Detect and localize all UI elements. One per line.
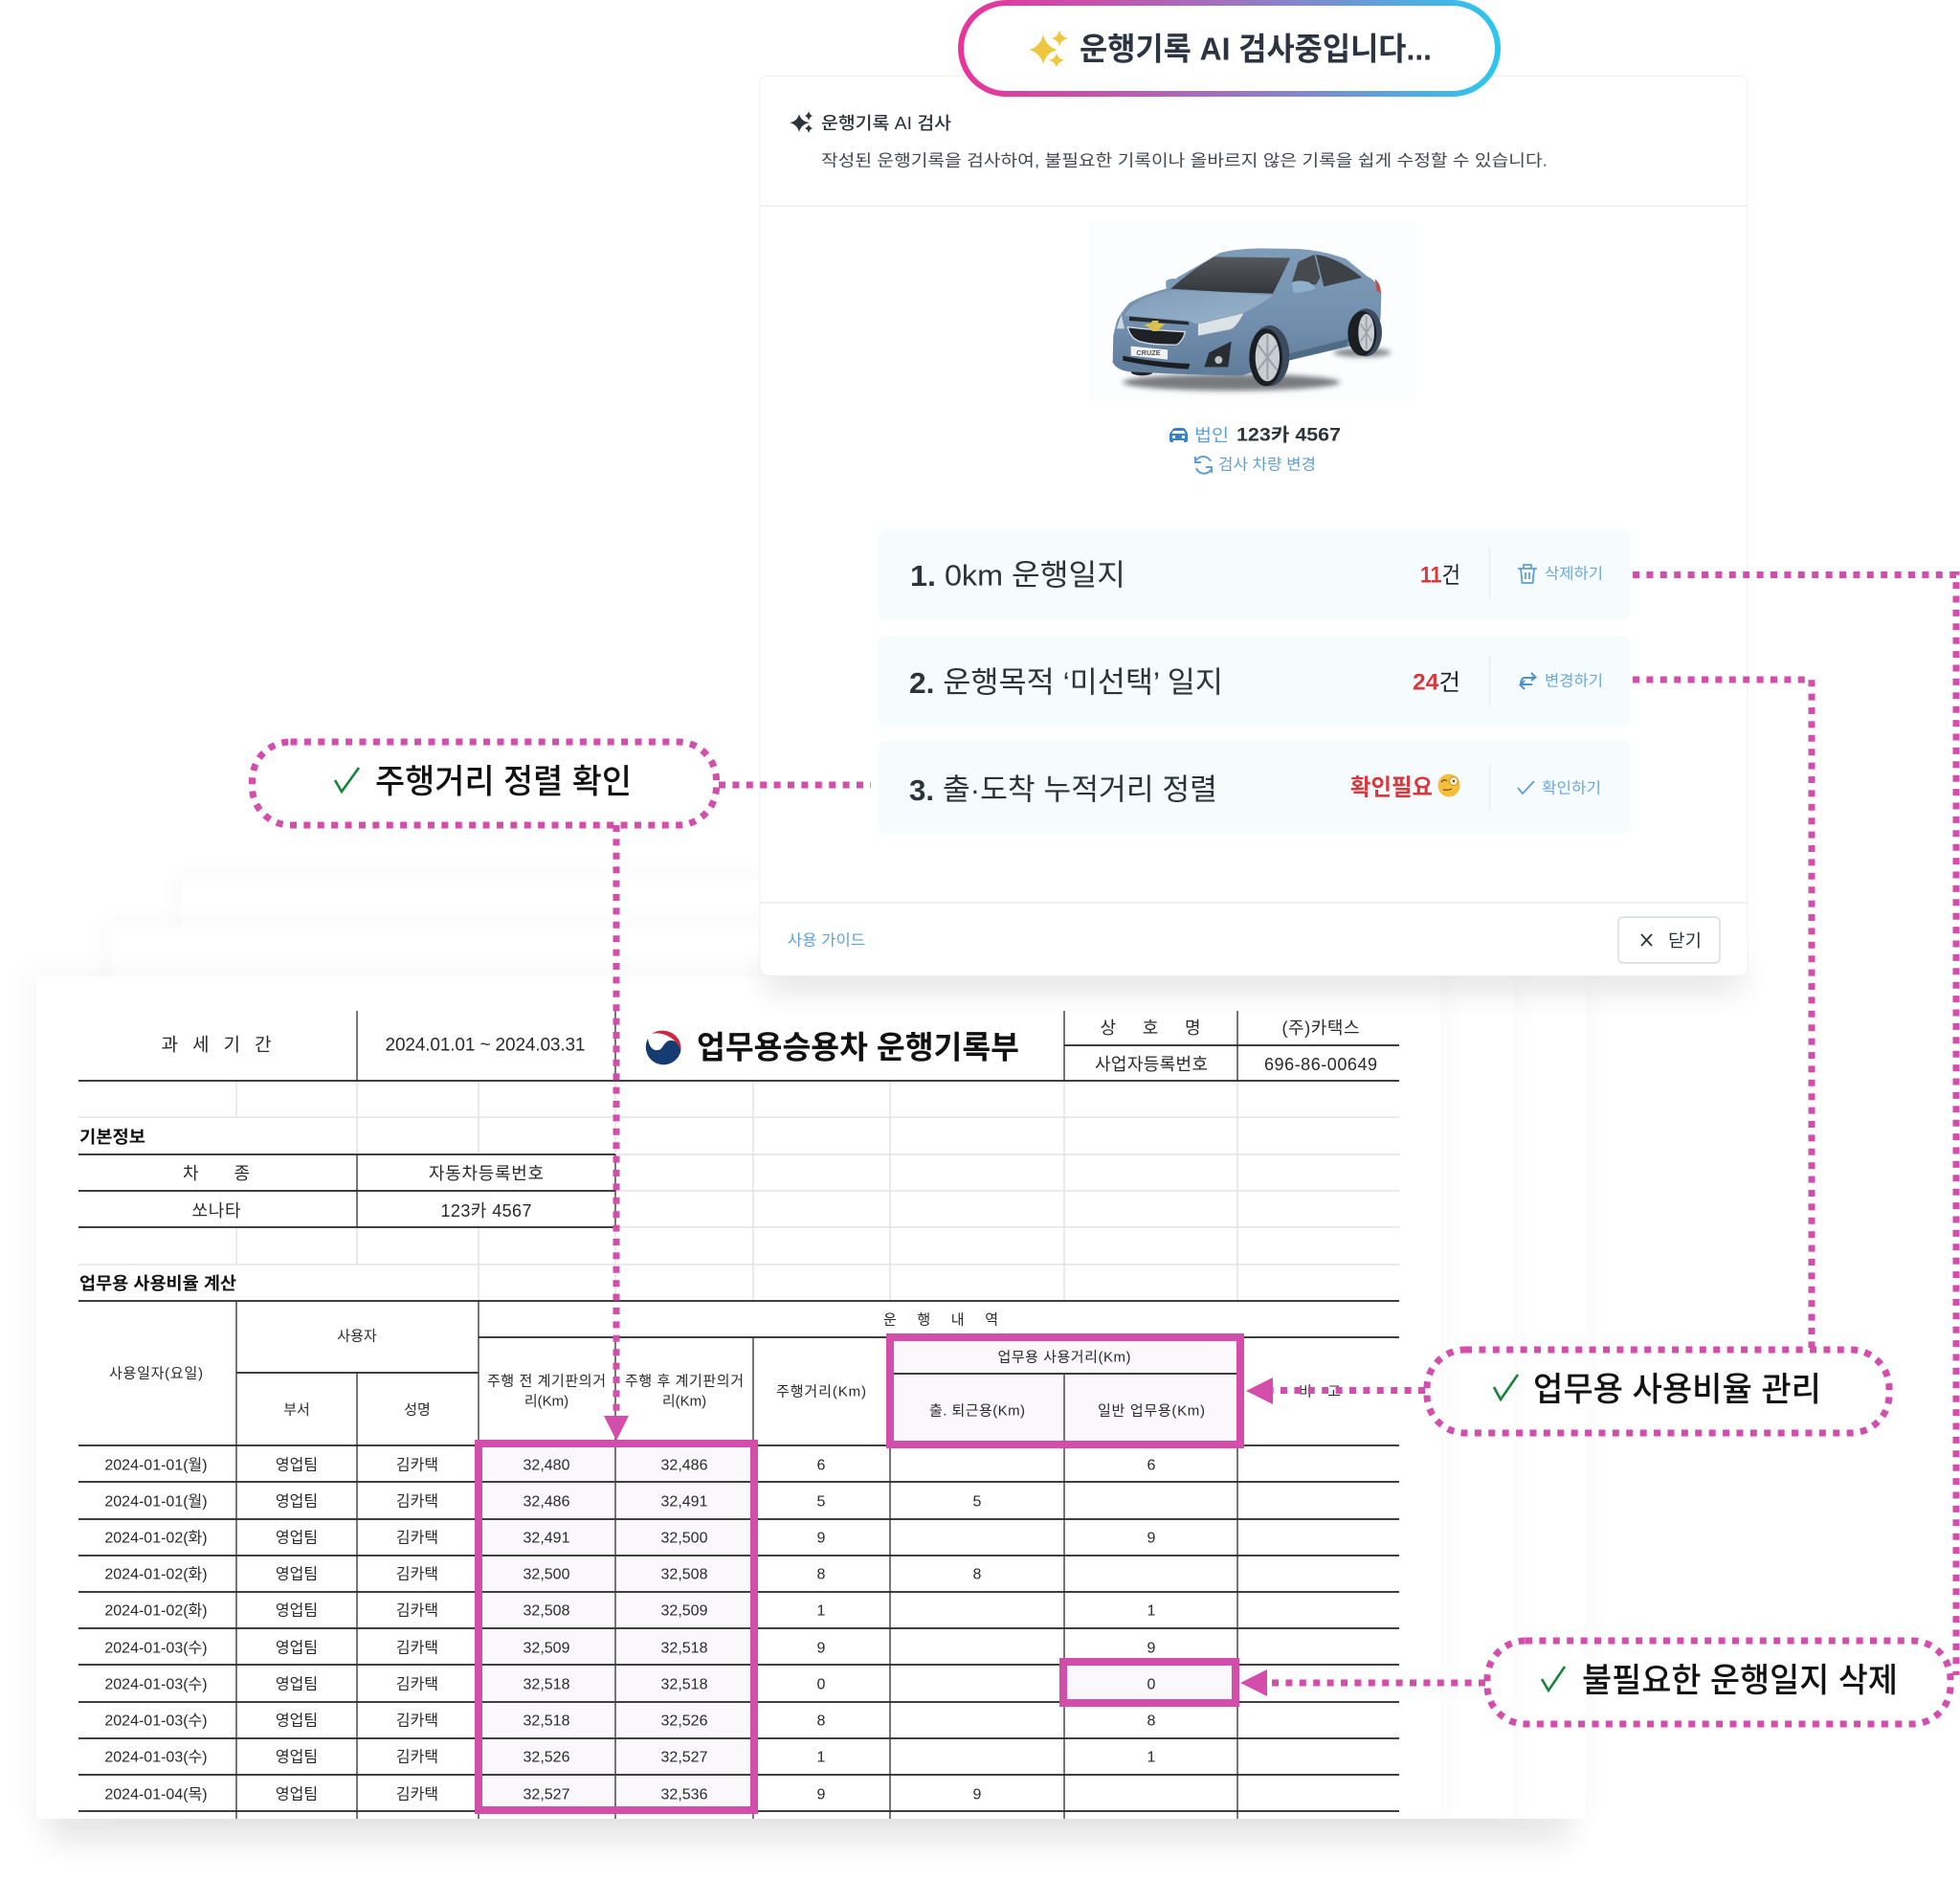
highlight box: business distance columns — [890, 1337, 1240, 1444]
log table rows: 9 — [1147, 1530, 1156, 1547]
log table rows: 8 — [1147, 1713, 1156, 1729]
form header: 2024.01.01 ~ 2024.03.31 — [385, 1036, 586, 1055]
log table rows: 1 — [1147, 1750, 1156, 1765]
icon: government taegeuk logo — [645, 1030, 681, 1064]
log table column headers: 주행거리(Km) — [776, 1384, 866, 1400]
form header: 696-86-00649 — [1264, 1055, 1377, 1074]
log table rows: 32,536 — [661, 1786, 708, 1803]
log table rows: 32,486 — [523, 1493, 570, 1511]
vehicle identification: 123카 4567 — [1236, 425, 1341, 446]
check item 3: cumulative distance order: 3. 출·도착 누적거리 정렬 — [909, 773, 1217, 806]
usage guide link: 사용 가이드 — [788, 932, 865, 950]
document: vehicle operation log form — [78, 1011, 1399, 1819]
check item 3: cumulative distance order: 확인하기 — [1542, 779, 1601, 796]
close button — [1618, 917, 1720, 963]
check item 1: 0km logs: 삭제하기 — [1545, 565, 1603, 582]
callout: delete unnecessary logs — [1487, 1641, 1950, 1724]
callout: sort check — [253, 742, 716, 825]
log table rows: 32,500 — [523, 1566, 570, 1583]
highlight box: odometer columns — [479, 1444, 754, 1810]
log table rows: 5 — [973, 1493, 982, 1511]
section: basic info: 차 종 — [183, 1164, 250, 1183]
log table rows: 32,518 — [523, 1677, 570, 1692]
section: basic info: 자동차등록번호 — [429, 1164, 544, 1183]
log table rows: 김카택 — [396, 1457, 438, 1474]
callout: business ratio: 업무용 사용비율 관리 — [1533, 1371, 1821, 1409]
log table column headers: 부서 — [283, 1401, 310, 1419]
callout: delete unnecessary logs: 불필요한 운행일지 삭제 — [1582, 1662, 1898, 1700]
log table rows: 영업팀 — [276, 1675, 318, 1692]
log table rows: 8 — [817, 1713, 826, 1729]
log table rows: 9 — [817, 1786, 826, 1803]
check item 1: 0km logs — [878, 529, 1631, 619]
icon: check — [1518, 781, 1534, 794]
icon: green check — [1494, 1375, 1518, 1400]
check item 2: unselected purpose: 2. 운행목적 ‘미선택’ 일지 — [909, 666, 1223, 699]
log table rows: 2024-01-03(수) — [104, 1675, 208, 1692]
log table rows: 32,509 — [661, 1602, 708, 1620]
check item 2: unselected purpose — [878, 636, 1631, 727]
connector: item 3 to sort callout — [719, 781, 871, 789]
arrow: ratio callout to business columns — [1246, 1377, 1425, 1404]
change vehicle link: 검사 차량 변경 — [1218, 456, 1316, 473]
log table rows: 8 — [973, 1566, 982, 1583]
log table rows: 32,491 — [523, 1530, 570, 1547]
log table column headers: 리(Km) — [662, 1394, 706, 1409]
log table rows: 영업팀 — [276, 1566, 318, 1583]
log table rows: 9 — [973, 1786, 982, 1803]
log table column headers: 출. 퇴근용(Km) — [929, 1403, 1025, 1419]
check item 3: cumulative distance order — [878, 741, 1631, 834]
arrow: sort callout to odometer columns — [604, 825, 629, 1441]
log table rows: 김카택 — [396, 1786, 438, 1803]
log table rows: 32,508 — [523, 1602, 570, 1620]
log table rows: 9 — [1147, 1641, 1156, 1656]
log table rows: 32,527 — [523, 1786, 570, 1803]
log table rows: 김카택 — [396, 1566, 438, 1583]
check item 1: 0km logs: 11건 — [1420, 563, 1460, 588]
log table rows: 32,518 — [523, 1713, 570, 1729]
log table rows: 32,526 — [661, 1713, 708, 1729]
log table rows: 영업팀 — [276, 1748, 318, 1765]
log table rows: 김카택 — [396, 1675, 438, 1692]
log table rows: 1 — [817, 1602, 826, 1620]
log table rows: 1 — [1147, 1602, 1156, 1620]
log table rows: 32,508 — [661, 1566, 708, 1583]
log table column headers: 주행 전 계기판의거 — [487, 1373, 606, 1390]
log table rows: 9 — [817, 1530, 826, 1547]
connector: item 2 to ratio callout — [1633, 680, 1812, 1348]
icon: yellow sparkles — [1029, 30, 1068, 68]
log table column headers: 운 행 내 역 — [883, 1311, 998, 1329]
modal heading: 운행기록 AI 검사 — [821, 114, 951, 133]
arrow: delete callout to zero cell — [1240, 1669, 1485, 1696]
icon: monocle emoji — [1437, 773, 1460, 796]
log table rows: 김카택 — [396, 1602, 438, 1620]
form header: 과 세 기 간 — [161, 1034, 272, 1055]
log table rows: 김카택 — [396, 1712, 438, 1729]
log table rows: 김카택 — [396, 1639, 438, 1656]
log table column headers: 비 고 — [1299, 1384, 1341, 1400]
callout: business ratio — [1427, 1350, 1889, 1433]
vehicle identification — [1169, 425, 1341, 446]
log table rows: 영업팀 — [276, 1493, 318, 1511]
log table rows: 32,500 — [661, 1530, 708, 1547]
log table rows: 32,526 — [523, 1750, 570, 1765]
log table rows: 0 — [1147, 1677, 1156, 1692]
section: basic info — [79, 1128, 544, 1293]
log table column headers: 사용자 — [337, 1329, 377, 1344]
log table rows: 0 — [817, 1677, 826, 1692]
section: basic info: 업무용 사용비율 계산 — [79, 1274, 236, 1293]
log table rows: 6 — [1147, 1457, 1156, 1474]
icon: swap arrows — [1520, 673, 1535, 689]
log table rows: 32,491 — [661, 1493, 708, 1511]
form header: 사업자등록번호 — [1095, 1055, 1208, 1074]
log table rows — [104, 1457, 1156, 1803]
log table rows: 영업팀 — [276, 1639, 318, 1656]
log table rows: 32,509 — [523, 1641, 570, 1656]
log table column headers: 일반 업무용(Km) — [1098, 1403, 1205, 1419]
stacked paper sheets — [23, 871, 1594, 1841]
highlight box: zero km cell — [1063, 1662, 1236, 1703]
log table column headers: 주행 후 계기판의거 — [625, 1373, 744, 1390]
gradient status pill — [961, 3, 1498, 94]
icon: refresh — [1195, 457, 1212, 474]
log table rows: 2024-01-02(화) — [104, 1530, 208, 1547]
log table rows: 6 — [817, 1457, 826, 1474]
log table rows: 32,527 — [661, 1750, 708, 1765]
log table column headers: 리(Km) — [524, 1394, 568, 1409]
log table rows: 김카택 — [396, 1493, 438, 1511]
icon: trash — [1518, 565, 1537, 583]
log table rows: 영업팀 — [276, 1602, 318, 1620]
log table rows: 2024-01-02(화) — [104, 1566, 208, 1583]
log table column headers — [109, 1311, 1341, 1419]
log table rows: 8 — [817, 1566, 826, 1583]
form header: (주)카택스 — [1282, 1019, 1359, 1038]
log table rows: 영업팀 — [276, 1786, 318, 1803]
section: basic info: 123카 4567 — [440, 1201, 532, 1220]
log table rows: 2024-01-02(화) — [104, 1602, 208, 1620]
check item 2: unselected purpose: 변경하기 — [1545, 672, 1603, 689]
check item 3: cumulative distance order: 확인필요 — [1350, 775, 1433, 800]
car image — [1089, 222, 1416, 402]
icon: dark sparkle — [790, 111, 813, 133]
highlighted cell tints — [479, 1337, 1240, 1810]
form header — [161, 1019, 1377, 1074]
status text: 운행기록 AI 검사중입니다... — [1080, 31, 1432, 67]
check item 1: 0km logs: 1. 0km 운행일지 — [910, 559, 1125, 592]
section: basic info: 기본정보 — [79, 1128, 145, 1147]
log table column headers: 업무용 사용거리(Km) — [997, 1350, 1131, 1365]
log table rows: 2024-01-01(월) — [104, 1457, 208, 1474]
log table rows: 32,518 — [661, 1641, 708, 1656]
log table rows: 김카택 — [396, 1530, 438, 1547]
log table rows: 영업팀 — [276, 1712, 318, 1729]
log table rows: 2024-01-04(목) — [104, 1786, 208, 1803]
log table rows: 김카택 — [396, 1748, 438, 1765]
vehicle identification: 법인 — [1194, 426, 1229, 445]
icon: green check — [335, 768, 359, 792]
form header: 상 호 명 — [1101, 1019, 1200, 1038]
log table rows: 영업팀 — [276, 1457, 318, 1474]
table rules — [78, 1011, 1399, 1819]
icon: green check — [1542, 1667, 1565, 1691]
log table rows: 5 — [817, 1493, 826, 1511]
log table rows: 영업팀 — [276, 1530, 318, 1547]
modal description: 작성된 운행기록을 검사하여, 불필요한 기록이나 올바르지 않은 기록을 쉽게 수정할 수 있습니다. — [821, 151, 1548, 170]
check item 2: unselected purpose: 24건 — [1413, 670, 1460, 695]
form title: 업무용승용차 운행기록부 — [697, 1030, 1019, 1064]
log table rows: 32,486 — [661, 1457, 708, 1474]
log table rows: 1 — [817, 1750, 826, 1765]
callout: sort check: 주행거리 정렬 확인 — [375, 764, 632, 800]
log table rows: 32,518 — [661, 1677, 708, 1692]
car badge text: CRUZE — [1136, 348, 1161, 357]
section: basic info: 쏘나타 — [191, 1201, 241, 1220]
modal shadow — [766, 957, 1742, 992]
log table rows: 2024-01-03(수) — [104, 1639, 208, 1656]
log table rows: 9 — [817, 1641, 826, 1656]
log table rows: 2024-01-03(수) — [104, 1748, 208, 1765]
faint spreadsheet grid — [78, 1081, 1399, 1301]
log table column headers: 성명 — [404, 1401, 431, 1419]
icon: car — [1169, 428, 1188, 442]
close button: 닫기 — [1668, 931, 1702, 951]
log table rows: 2024-01-01(월) — [104, 1493, 208, 1511]
log table rows: 2024-01-03(수) — [104, 1712, 208, 1729]
connector: item 1 to delete callout — [1633, 574, 1956, 1675]
panel: AI inspection modal — [760, 77, 1748, 976]
log table rows: 32,480 — [523, 1457, 570, 1474]
log table column headers: 사용일자(요일) — [109, 1365, 203, 1382]
